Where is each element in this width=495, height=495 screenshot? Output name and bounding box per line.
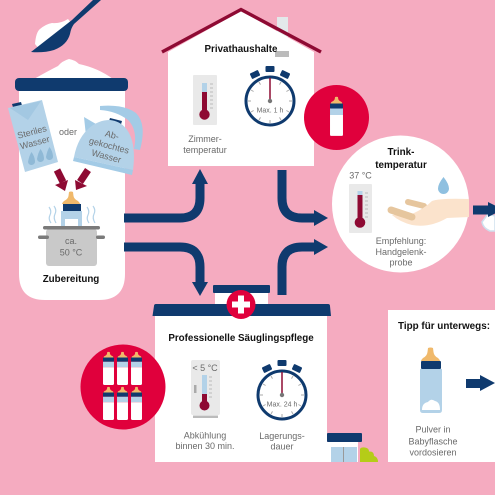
text: cooling bbox=[175, 430, 235, 451]
icon: bottle in pot: ca. bbox=[65, 236, 77, 246]
heading: Professionelle Säuglingspflege: Professionelle Säuglingspflege bbox=[168, 333, 314, 344]
label: 37 °C: 37 °C bbox=[349, 170, 372, 180]
icon: powder spoon bbox=[31, 0, 101, 52]
text: pre-dose powder: Babyflasche bbox=[408, 436, 458, 446]
heading: Tipp für unterwegs: Tipp für unterwegs: bbox=[398, 321, 490, 332]
arrow: to household bbox=[124, 169, 208, 218]
text: room temperature: Zimmer- bbox=[188, 134, 222, 144]
icon: bottle in pot bbox=[38, 192, 105, 266]
icon: kettle: gekochtes bbox=[88, 135, 131, 156]
icon: thermometer cold bbox=[191, 360, 220, 418]
arrow: household to drinking bbox=[282, 170, 328, 226]
icon: kettle: Ab- bbox=[104, 128, 120, 142]
heading: Zubereitung: Zubereitung bbox=[43, 274, 99, 285]
heading: Privathaushalte: Privathaushalte bbox=[205, 44, 278, 55]
text: recommendation bbox=[375, 236, 427, 268]
text: pre-dose powder bbox=[408, 424, 458, 458]
panel: private households bbox=[162, 10, 321, 166]
icon: water carton bbox=[8, 100, 58, 172]
panel: drinking temperature bbox=[332, 136, 469, 272]
powder mound bbox=[34, 59, 113, 79]
icon: stopwatch 1 h bbox=[246, 66, 294, 125]
arrow: right exit bbox=[473, 202, 495, 231]
text: recommendation: Empfehlung: bbox=[376, 236, 426, 246]
heading: Trinktemperatur bbox=[375, 147, 427, 171]
icon: thermometer cold: < 5 °C bbox=[192, 363, 218, 373]
heading: Trinktemperatur: Trink- bbox=[388, 147, 414, 158]
icon: red cross bbox=[226, 290, 256, 319]
icon: water drop bbox=[438, 177, 449, 194]
building body bbox=[155, 316, 327, 462]
icon: kettle: Wasser bbox=[90, 148, 122, 165]
roof bbox=[162, 10, 321, 52]
text: storage duration bbox=[259, 431, 305, 452]
roof bbox=[152, 304, 331, 316]
text: storage duration: dauer bbox=[270, 442, 294, 452]
text: pre-dose powder: vordosieren bbox=[409, 448, 457, 458]
text: storage duration: Lagerungs- bbox=[259, 431, 305, 441]
icon: thermometer bbox=[193, 75, 217, 125]
panel: preparation jar bbox=[8, 59, 143, 300]
icon: water carton: Wasser bbox=[19, 134, 51, 151]
arrow: care facility to drinking bbox=[282, 239, 328, 295]
icon: kettle bbox=[73, 106, 143, 175]
arrow: tip continues bbox=[466, 375, 495, 391]
chimney shadow bbox=[275, 51, 289, 57]
text: room temperature: temperatur bbox=[183, 145, 227, 155]
house body bbox=[168, 11, 314, 166]
text: cooling: Abkühlung bbox=[184, 430, 226, 440]
text: pre-dose powder: Pulver in bbox=[415, 424, 451, 434]
arrow: to care facility bbox=[124, 247, 208, 296]
text: recommendation: probe bbox=[389, 258, 413, 268]
icon: hand bbox=[391, 199, 469, 226]
icon: thermometer 37 °C bbox=[349, 184, 372, 233]
panel: professional infant care bbox=[152, 285, 378, 462]
text: recommendation: Handgelenk- bbox=[375, 247, 427, 257]
jar body bbox=[19, 85, 125, 300]
icon: bottle with powder bbox=[420, 348, 442, 413]
jar lid bbox=[15, 78, 128, 91]
text: cooling: binnen 30 min. bbox=[175, 441, 235, 451]
icon: bottle in pot: 50 °C bbox=[60, 248, 83, 258]
text: room temperature bbox=[183, 134, 227, 155]
icon: six bottles circle bbox=[80, 344, 166, 430]
heading: Trinktemperatur: temperatur bbox=[375, 160, 427, 171]
small building bbox=[327, 433, 378, 462]
icon: stopwatch 1 h: Max. 1 h bbox=[257, 108, 284, 114]
icon: water carton: Steriles bbox=[16, 123, 48, 141]
icon: stopwatch 24 h bbox=[258, 360, 306, 419]
arrows: into pot bbox=[55, 170, 88, 191]
label: oder: oder bbox=[59, 127, 77, 137]
panel: travel tip bbox=[388, 310, 495, 462]
chimney bbox=[277, 17, 288, 37]
building top bbox=[215, 292, 268, 306]
icon: single bottle circle bbox=[304, 85, 369, 150]
icon: stopwatch 24 h: Max. 24 h bbox=[267, 402, 297, 408]
